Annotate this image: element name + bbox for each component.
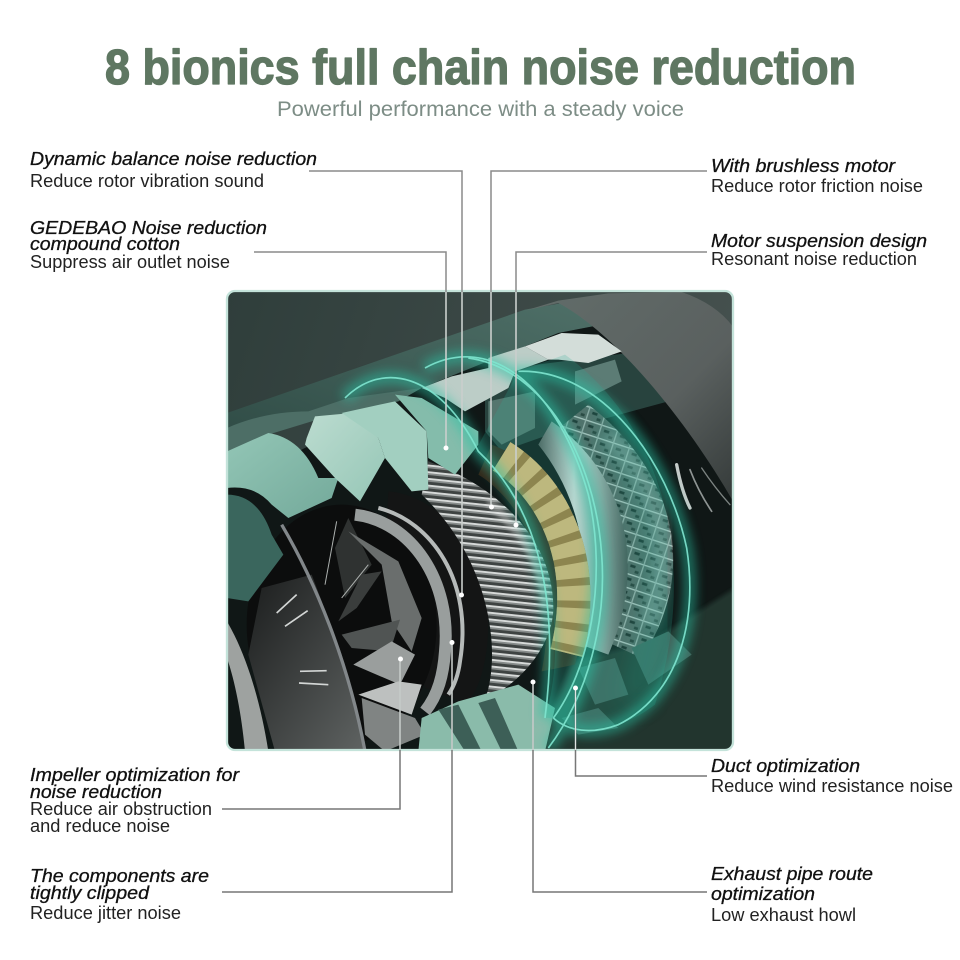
- motor illustration: [227, 292, 735, 751]
- upper foam strip: [227, 388, 422, 451]
- wave arc: [518, 371, 690, 730]
- pale top block: [525, 333, 622, 363]
- outer housing crescent: [227, 621, 268, 751]
- housing band: [228, 304, 592, 427]
- mesh highlights: [608, 435, 662, 625]
- hub ticks: [277, 595, 328, 685]
- label: brushless motor: With brushless motor: [711, 156, 896, 176]
- spoke: [325, 521, 337, 585]
- tick: [300, 670, 327, 672]
- panel: motor cutaway image: [227, 291, 735, 751]
- impeller blades: [335, 518, 425, 751]
- mint block 4: [395, 395, 478, 475]
- gear bright edge: [488, 501, 545, 608]
- title: 8 bionics full chain noise reduction: [105, 41, 856, 95]
- leader line: compound cotton: [254, 252, 448, 450]
- silver bearing: [538, 421, 628, 655]
- bottom fin shadows: [438, 698, 518, 751]
- label: clipped components: tightly clipped: [30, 883, 150, 903]
- impeller disc rim: [282, 525, 365, 751]
- lower right shell: [538, 588, 735, 751]
- label: exhaust pipe: optimization: [711, 884, 815, 904]
- label: dynamic balance: Reduce rotor vibration sound: [30, 171, 264, 191]
- spoke: [342, 565, 368, 598]
- impeller fine spokes: [325, 521, 368, 598]
- blade: [335, 518, 372, 598]
- outer ring lines: [378, 508, 463, 695]
- glow arc: [425, 357, 596, 718]
- right end cap: [525, 292, 735, 505]
- label: duct: Reduce wind resistance noise: [711, 776, 953, 796]
- label: brushless motor: Reduce rotor friction noise: [711, 176, 923, 196]
- bottom mint fins: [418, 685, 555, 751]
- mint block 3: [342, 401, 428, 491]
- label: compound cotton: compound cotton: [30, 234, 180, 254]
- leader line: brushless motor: [489, 171, 707, 510]
- leader line: dynamic balance: [309, 171, 464, 598]
- label: impeller: Impeller optimization for: [30, 765, 240, 785]
- blade: [338, 571, 382, 621]
- leader line: motor suspension: [514, 252, 707, 528]
- block: [562, 708, 618, 735]
- motor interior: [227, 325, 735, 751]
- tick: [277, 595, 297, 613]
- sound wave glow: [345, 357, 690, 748]
- wave arc: [468, 358, 602, 748]
- leader line: impeller: [222, 656, 403, 809]
- dark stator back: [478, 445, 585, 671]
- label: dynamic balance: Dynamic balance noise reduction: [30, 149, 317, 169]
- mint block 2: [305, 413, 385, 501]
- inner fins: [348, 531, 422, 651]
- glow arc: [345, 378, 550, 718]
- glow arc: [518, 371, 690, 730]
- shadow: [438, 705, 482, 751]
- wave arc: [425, 357, 596, 718]
- wave arc: [345, 378, 550, 718]
- label: motor suspension: Resonant noise reduction: [711, 249, 917, 269]
- panel frame: [227, 291, 733, 750]
- translucent sound wave fill: [475, 355, 674, 729]
- pale upper blocks: [422, 346, 548, 411]
- gear teeth: [422, 461, 553, 700]
- tick: [285, 611, 308, 626]
- fin: [690, 470, 712, 511]
- inner silver ring: [355, 515, 446, 711]
- label: clipped components: [30, 866, 209, 923]
- leader line: exhaust pipe: [530, 680, 707, 892]
- outlet fins: [677, 465, 730, 511]
- label: brushless motor: [711, 156, 923, 196]
- fin: [702, 468, 730, 505]
- label: clipped components: The components are: [30, 866, 209, 886]
- label: duct: Duct optimization: [711, 756, 860, 776]
- shadow: [478, 698, 518, 751]
- blade: [342, 620, 400, 651]
- dim block right: [575, 360, 622, 405]
- glow arc: [468, 358, 602, 748]
- broad glow: [602, 428, 656, 701]
- tick: [299, 683, 328, 685]
- panel base: [227, 291, 733, 750]
- label: impeller: and reduce noise: [30, 816, 170, 836]
- label: compound cotton: Suppress air outlet noise: [30, 252, 230, 272]
- block: [632, 631, 692, 685]
- label: duct: [711, 756, 953, 796]
- black seal ring: [385, 491, 488, 703]
- impeller backing: [247, 505, 437, 745]
- mint block 1: [227, 433, 338, 518]
- dim block left: [488, 391, 535, 445]
- leader line: duct: [573, 686, 707, 776]
- label: exhaust pipe: [711, 864, 873, 925]
- copper winding base: [502, 456, 574, 653]
- label: compound cotton: GEDEBAO Noise reduction: [30, 218, 267, 238]
- teal cavity behind rings: [485, 351, 668, 451]
- fin: [677, 465, 690, 508]
- label: compound cotton: [30, 218, 267, 272]
- subtitle: Powerful performance with a steady voice: [277, 98, 684, 121]
- label: clipped components: Reduce jitter noise: [30, 903, 181, 923]
- label: motor suspension: [711, 231, 927, 269]
- sound wave arcs: [345, 357, 690, 748]
- label: exhaust pipe: Low exhaust howl: [711, 905, 856, 925]
- label: impeller: noise reduction: [30, 782, 162, 802]
- label: impeller: Reduce air obstruction: [30, 799, 212, 819]
- hub base: [248, 575, 365, 751]
- mesh drum: [555, 405, 673, 658]
- blade: [353, 641, 415, 685]
- copper windings: [502, 456, 574, 653]
- block: [578, 658, 628, 705]
- blade: [362, 698, 421, 749]
- leader line: clipped components: [222, 640, 454, 892]
- label: motor suspension: Motor suspension design: [711, 231, 927, 251]
- label: dynamic balance: [30, 149, 317, 191]
- label: exhaust pipe: Exhaust pipe route: [711, 864, 873, 884]
- dim lower blocks: [562, 631, 692, 735]
- label: impeller: [30, 765, 240, 836]
- teal left wall: [227, 495, 283, 601]
- blade: [358, 681, 422, 715]
